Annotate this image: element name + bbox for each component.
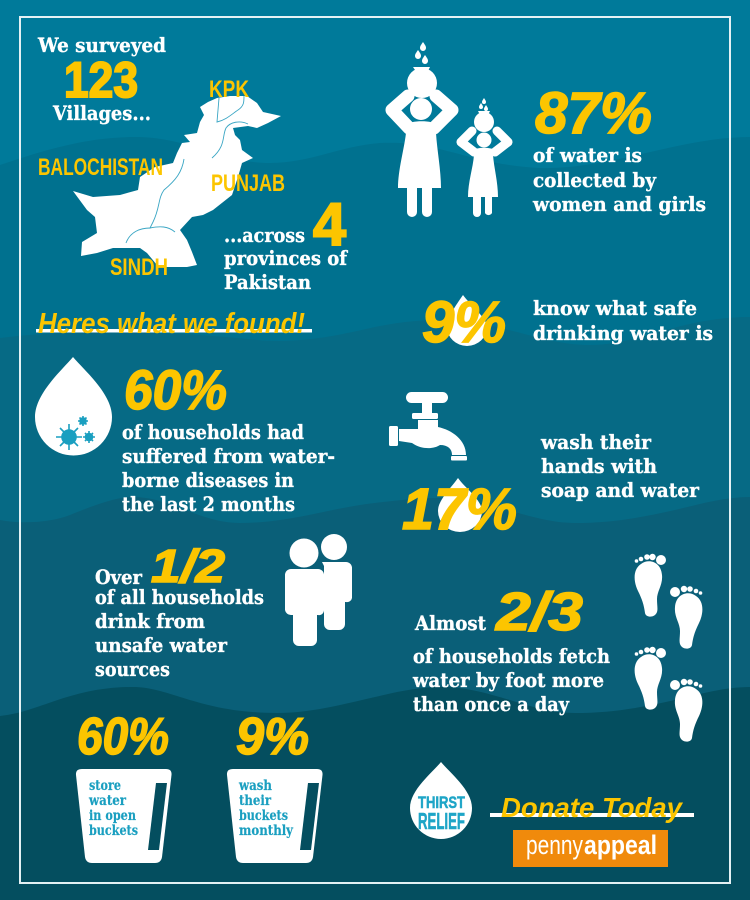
stat: 60 percent water-borne diseases [122,358,335,516]
logo: penny appeal [513,830,668,867]
stat: 9 percent safe drinking water: know what safe [533,296,697,320]
logo: thirst relief drop [410,762,472,839]
stat: 9 percent wash buckets: wash [238,778,272,794]
stat: 60 percent water-borne diseases: of households had [122,420,304,444]
stat: almost two thirds fetch by foot [412,582,610,716]
stat: 17 percent wash hands: hands with [541,454,657,478]
stat: over half unsafe water: unsafe water [95,633,227,657]
stat: almost two thirds fetch by foot: than once a day [413,692,570,716]
stat: 17 percent wash hands: wash their [540,430,651,454]
icon: water drop with germs [35,357,112,456]
stat: 60 percent water-borne diseases: borne diseases in [122,468,294,492]
stat: 60 percent open buckets: store [89,778,121,794]
stat: over half unsafe water: drink from [95,609,205,633]
stat: 87 percent women and girls: collected by [533,168,657,192]
stat: 9 percent safe drinking water [422,290,713,355]
stat: 17 percent wash hands [402,430,699,542]
stat: 60 percent water-borne diseases: suffered from water- [122,444,335,468]
across 4 provinces text: provinces of [224,246,348,270]
logo: penny appeal: penny [526,830,583,860]
stat: 9 percent wash buckets: buckets [239,808,288,824]
icon: two people [285,534,352,646]
logo: thirst relief drop: THIRST [418,793,465,812]
stat: 60 percent water-borne diseases: the last 2 months [122,492,295,516]
call to action: donate today: Donate Today [501,792,683,823]
stat: almost two thirds fetch by foot: Almost [414,611,487,635]
stat: 17 percent wash hands: soap and water [541,478,699,502]
stat: 87 percent women and girls: of water is [533,143,642,167]
logo: thirst relief drop: RELIEF [418,808,465,834]
stat: 60 percent open buckets: water [88,793,127,809]
stat: 60 percent water-borne diseases: 60% [124,358,227,421]
stat: 60 percent open buckets: in open [89,808,136,824]
stat: over half unsafe water: sources [95,657,170,681]
heading: heres what we found: Heres what we found! [38,308,305,340]
stat: almost two thirds fetch by foot: water by foot more [412,668,604,692]
stat: 87 percent women and girls: 87% [535,81,652,146]
map of Pakistan with provinces [38,76,285,281]
stat: over half unsafe water: 1/2 [151,540,225,592]
stat: over half unsafe water: of all households [95,585,264,609]
icon: footprints [635,554,702,742]
province labels [38,76,285,281]
province labels: BALOCHISTAN [38,154,163,181]
stat: 9 percent safe drinking water: drinking water is [533,321,713,345]
across 4 provinces text: Pakistan [224,270,311,294]
across 4 provinces text: ...across [224,223,305,247]
across 4 provinces text: 4 [313,191,347,258]
province labels: KPK [209,76,250,103]
icon: tap [389,392,467,460]
intro: we surveyed 123 villages [37,33,166,125]
stat: 9 percent wash buckets: monthly [239,823,294,839]
stat: over half unsafe water [95,540,264,681]
stat: almost two thirds fetch by foot: 2/3 [495,582,583,642]
stat: 17 percent wash hands: 17% [402,477,517,542]
across 4 provinces text [224,191,348,294]
stat: 9 percent wash buckets: 9% [236,708,309,766]
icon: women and girl carrying pots [392,42,508,217]
stat: 60 percent open buckets: 60% [77,708,169,766]
stat: 87 percent women and girls [532,81,706,216]
stat: over half unsafe water: Over [95,565,142,589]
stat: 9 percent wash buckets: their [239,793,272,809]
stat: 9 percent wash buckets [227,708,323,863]
intro: we surveyed 123 villages: We surveyed [37,33,166,57]
intro: we surveyed 123 villages: 123 [64,52,138,108]
province labels: SINDH [110,254,168,281]
stat: almost two thirds fetch by foot: of households fetch [413,644,610,668]
stat: 60 percent open buckets [76,708,172,863]
logo: penny appeal: appeal [584,830,657,860]
stat: 87 percent women and girls: women and girls [532,192,706,216]
rivers on map [126,96,248,243]
stat: 9 percent safe drinking water: 9% [422,290,506,355]
intro: we surveyed 123 villages: Villages... [52,101,151,125]
province labels: PUNJAB [211,170,285,197]
stat: 60 percent open buckets: buckets [89,823,138,839]
